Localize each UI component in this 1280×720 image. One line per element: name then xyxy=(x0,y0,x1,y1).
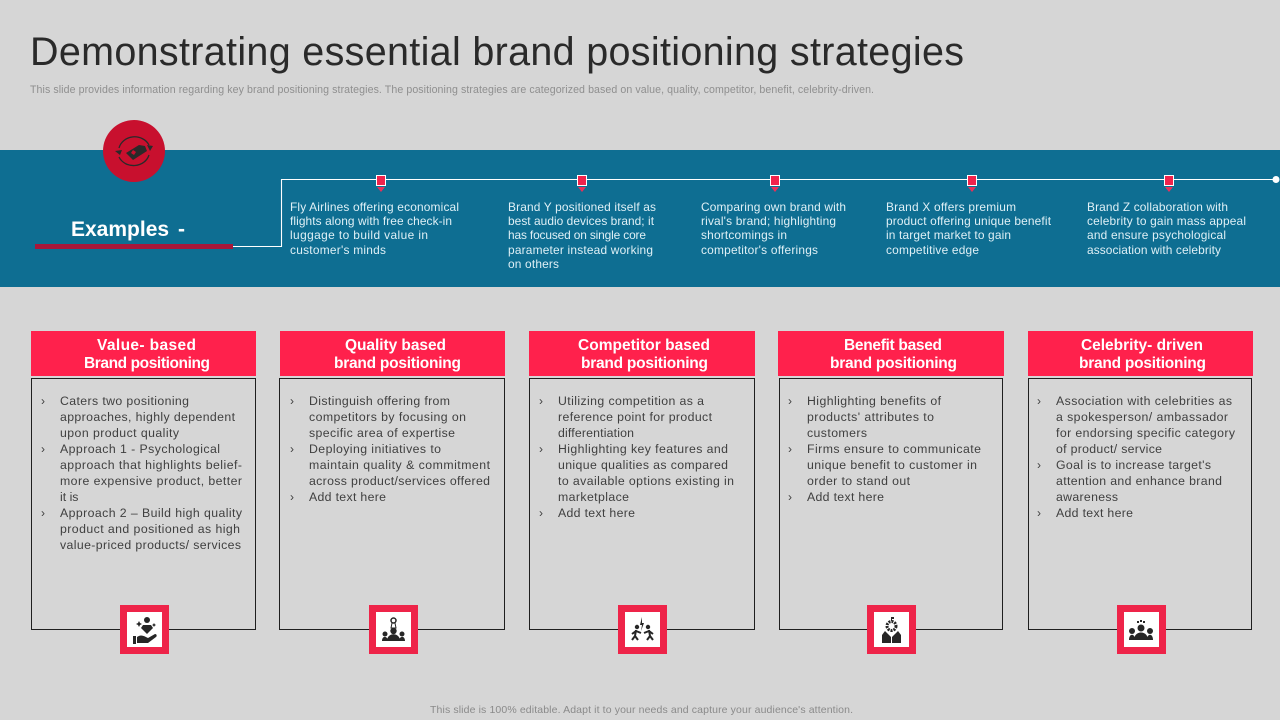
example text: brand x: competitive edge xyxy=(886,243,979,257)
timeline connector xyxy=(233,176,1280,246)
example text: brand x: product offering unique benefit xyxy=(886,214,1052,228)
card box xyxy=(780,378,1002,630)
example text: comparing own brand: competitor's offerings xyxy=(701,243,818,257)
bullet list: Goal is to increase target's xyxy=(1056,458,1211,472)
bullet list xyxy=(290,394,491,504)
card box xyxy=(280,378,504,630)
header: quality based: Quality based xyxy=(345,337,446,354)
panel: celebrity driven xyxy=(1028,331,1253,650)
bullet list: of product/ service xyxy=(1056,442,1162,456)
bullet list: maintain quality & commitment xyxy=(309,458,491,472)
panel: benefit based xyxy=(778,331,1004,650)
bullet list: approaches, highly dependent xyxy=(60,410,236,424)
bullet list: a spokesperson/ ambassador xyxy=(1056,410,1228,424)
header: competitor based: brand positioning xyxy=(581,355,708,372)
bullet list xyxy=(788,394,981,504)
bullet list: approach that highlights belief- xyxy=(60,458,242,472)
bullet list: › xyxy=(539,394,543,408)
bullet list: value-priced products/ services xyxy=(60,538,241,552)
example text: brand y: has focused on single core xyxy=(508,228,646,242)
bullet list: it is xyxy=(60,490,78,504)
example text: brand y: parameter instead working xyxy=(508,243,653,257)
header: benefit based xyxy=(778,331,1004,376)
bullet list: Association with celebrities as xyxy=(1056,394,1232,408)
bullet list: attention and enhance brand xyxy=(1056,474,1222,488)
example text: brand z: celebrity to gain mass appeal xyxy=(1087,214,1246,228)
bullet list: › xyxy=(539,442,543,456)
icon: competing runners xyxy=(622,608,664,650)
bullet list: Add text here xyxy=(558,506,635,520)
bullet list: Add text here xyxy=(309,490,386,504)
bullet list: upon product quality xyxy=(60,426,180,440)
bullet list: › xyxy=(1037,506,1041,520)
panel: value based xyxy=(31,331,256,650)
icon: hands with gear xyxy=(870,608,912,650)
example text: comparing own brand: rival's brand; highlighting xyxy=(701,214,836,228)
example text: brand z: association with celebrity xyxy=(1087,243,1221,257)
example text: fly airlines xyxy=(290,200,459,257)
bullet list: more expensive product, better xyxy=(60,474,242,488)
bullet list: for endorsing specific category xyxy=(1056,426,1236,440)
footer note: This slide is 100% editable. Adapt it to your needs and capture your audience's attention. xyxy=(430,704,853,716)
example text: fly airlines: Fly Airlines offering economical xyxy=(290,200,459,214)
bullet list: awareness xyxy=(1056,490,1118,504)
example text: fly airlines: flights along with free check-in xyxy=(290,214,452,228)
bullet list xyxy=(1037,394,1236,520)
bullet list: across product/services offered xyxy=(309,474,490,488)
example text: brand y: Brand Y positioned itself as xyxy=(508,200,656,214)
bullet list: products' attributes to xyxy=(807,410,934,424)
bullet list: order to stand out xyxy=(807,474,911,488)
heading: examples: - xyxy=(178,218,185,241)
example text: brand y xyxy=(508,200,656,271)
bullet list: competitors by focusing on xyxy=(309,410,466,424)
bullet list: › xyxy=(788,442,792,456)
header: celebrity driven xyxy=(1028,331,1253,376)
bullet list: Approach 1 - Psychological xyxy=(60,442,220,456)
bullet list: Utilizing competition as a xyxy=(558,394,704,408)
header: value based: Brand positioning xyxy=(84,355,210,372)
bullet list: › xyxy=(290,442,294,456)
heading: examples: Examples xyxy=(71,218,169,241)
timeline marker 5 xyxy=(1164,176,1174,192)
icon: award team xyxy=(372,608,414,650)
example text: fly airlines: customer's minds xyxy=(290,243,386,257)
bullet list: customers xyxy=(807,426,867,440)
header: celebrity driven: Celebrity- driven xyxy=(1081,337,1203,354)
example text: comparing own brand: shortcomings in xyxy=(701,228,787,242)
example text: fly airlines: luggage to build value in xyxy=(290,228,428,242)
bullet list: Caters two positioning xyxy=(60,394,189,408)
bullet list: Firms ensure to communicate xyxy=(807,442,981,456)
bullet list xyxy=(539,394,734,520)
bullet list: differentiation xyxy=(558,426,634,440)
panel: examples band xyxy=(0,120,1280,287)
card box xyxy=(1028,378,1252,630)
timeline marker 4 xyxy=(968,176,976,192)
bullet list: Deploying initiatives to xyxy=(309,442,441,456)
example text: brand x: in target market to gain xyxy=(886,228,1011,242)
example text: brand z: and ensure psychological xyxy=(1087,228,1226,242)
header: competitor based: Competitor based xyxy=(578,337,710,354)
bullet list: specific area of expertise xyxy=(309,426,455,440)
bullet list xyxy=(41,394,243,552)
bullet list: unique benefit to customer in xyxy=(807,458,977,472)
bullet list: › xyxy=(41,394,45,408)
header: benefit based: Benefit based xyxy=(844,337,942,354)
header: quality based: brand positioning xyxy=(334,355,461,372)
example text: brand x: Brand X offers premium xyxy=(886,200,1016,214)
bullet list: › xyxy=(1037,458,1041,472)
panel: quality based xyxy=(280,331,505,650)
timeline marker 2 xyxy=(578,176,586,192)
timeline marker 3 xyxy=(770,176,780,192)
timeline marker 1 xyxy=(376,176,386,192)
example text: comparing own brand: Comparing own brand with xyxy=(701,200,846,214)
bullet list: unique qualities as compared xyxy=(558,458,728,472)
bullet list: › xyxy=(290,394,294,408)
underline bar xyxy=(35,244,233,249)
subtitle: This slide provides information regarding key brand positioning strategies. The positioning strategies are categorized based on value, quality, competitor, benefit, celebrity-driven. xyxy=(30,84,874,96)
example text: brand y: best audio devices brand; it xyxy=(508,214,655,228)
header: benefit based: brand positioning xyxy=(830,355,957,372)
bullet list: reference point for product xyxy=(558,410,713,424)
bullet list: Highlighting key features and xyxy=(558,442,728,456)
bullet list: Add text here xyxy=(807,490,884,504)
header: competitor based xyxy=(529,331,755,376)
example text: brand x xyxy=(886,200,1052,257)
bullet list: Highlighting benefits of xyxy=(807,394,942,408)
bullet list: Add text here xyxy=(1056,506,1133,520)
bullet list: to available options existing in xyxy=(558,474,734,488)
header: celebrity driven: brand positioning xyxy=(1079,355,1206,372)
bullet list: › xyxy=(41,506,45,520)
bullet list: Distinguish offering from xyxy=(309,394,450,408)
icon: celebrity group xyxy=(1120,608,1162,650)
bullet list: marketplace xyxy=(558,490,629,504)
example text: brand y: on others xyxy=(508,257,559,271)
bullet list: › xyxy=(788,490,792,504)
example text: comparing own brand xyxy=(701,200,846,257)
bullet list: › xyxy=(290,490,294,504)
header: value based xyxy=(31,331,256,376)
header: value based: Value- based xyxy=(97,337,196,354)
card box xyxy=(530,378,754,630)
icon: price tag in circle xyxy=(103,120,165,182)
example text: brand z xyxy=(1087,200,1246,257)
bullet list: › xyxy=(539,506,543,520)
icon: hand holding diamond xyxy=(124,608,166,650)
example text: brand z: Brand Z collaboration with xyxy=(1087,200,1228,214)
card box xyxy=(32,378,256,630)
panel: competitor based xyxy=(529,331,755,650)
bullet list: › xyxy=(1037,394,1041,408)
bullet list: › xyxy=(41,442,45,456)
header: quality based xyxy=(280,331,505,376)
bullet list: product and positioned as high xyxy=(60,522,240,536)
title: Demonstrating essential brand positioning strategies xyxy=(30,30,964,74)
bullet list: › xyxy=(788,394,792,408)
bullet list: Approach 2 – Build high quality xyxy=(60,506,243,520)
